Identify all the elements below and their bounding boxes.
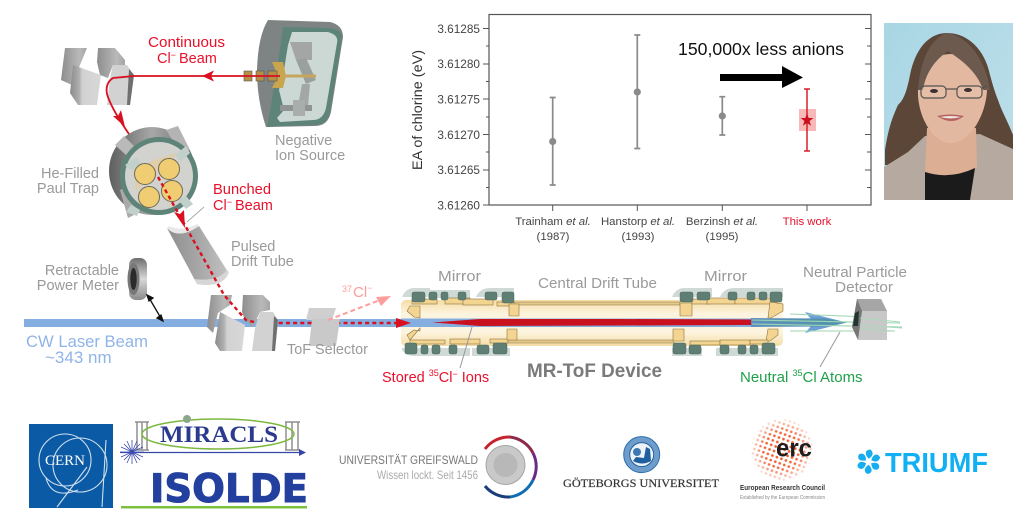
leader line: neutral atoms (820, 332, 840, 367)
label: 37Cl: 37 (342, 284, 352, 294)
label: stored ions: Cl (439, 370, 452, 386)
stored ions (433, 318, 751, 327)
logo: ISOLDE: ISOLDE (150, 467, 308, 512)
label: stored ions: Stored (382, 370, 425, 386)
logo: TRIUMF: TRIUMF (885, 447, 988, 478)
neck (925, 128, 977, 178)
y axis tick labels: 3.61260 (437, 198, 480, 212)
glasses (917, 86, 987, 98)
data: Trainham 1987 (549, 98, 556, 185)
data: Berzinsh 1995 (719, 97, 726, 135)
neutral beam (751, 312, 902, 333)
MR-ToF device (396, 288, 902, 356)
device body (401, 300, 783, 346)
face (918, 54, 987, 143)
label: continuous beam: Cl (157, 51, 171, 67)
label: negative ion source: Ion Source (275, 148, 345, 164)
hair (885, 33, 1013, 165)
laser beam (24, 319, 434, 327)
mirror electrodes: green (405, 292, 782, 354)
y axis title: EA of chlorine (eV) (409, 50, 425, 170)
label: continuous beam: Continuous (148, 35, 225, 51)
category labels: (1993) (622, 231, 655, 243)
label: neutral atoms: Cl Atoms (803, 369, 863, 386)
category labels: (1987) (537, 231, 570, 243)
label: stored ions: − (452, 369, 458, 379)
icon: lower quadrupole bender, front blocks (215, 312, 278, 351)
label: CW laser beam: CW Laser Beam (26, 332, 148, 351)
logo: Universität Greifswald: UNIVERSITÄT GREIFSWALD (339, 453, 478, 467)
laser inside device (401, 318, 753, 327)
diagram: beamline (24, 177, 907, 386)
label: neutral particle detector: Detector (835, 280, 893, 296)
label: 37Cl: − (367, 283, 372, 293)
label: bunched beam: Bunched (213, 182, 271, 198)
logo: ERC: Established by the European Commission (740, 495, 825, 501)
icon: He-filled Paul trap (109, 126, 198, 218)
logo: ERC (740, 419, 825, 501)
central tube walls (507, 302, 680, 343)
chart: EA of chlorine (409, 14, 871, 243)
label: retractable power meter: Power Meter (37, 278, 119, 294)
icon: ToF selector (306, 308, 340, 346)
icon: retractable power meter (128, 258, 147, 300)
data: Hanstorp 1993 (634, 35, 641, 148)
label: He-filled Paul trap: He-Filled (41, 166, 99, 182)
label: neutral atoms: 35 (793, 368, 803, 378)
annotation text: 150,000x less anions (678, 39, 844, 59)
arrow: entering ions (396, 318, 411, 328)
icon: lower quadrupole bender, back blocks (207, 295, 270, 333)
label: mirror right: Mirror (704, 269, 747, 285)
logo: Göteborgs Universitet (563, 437, 720, 490)
logo: ERC: European Research Council (740, 483, 825, 492)
arrow: continuous beam (107, 70, 280, 134)
logo: Universität Greifswald (339, 437, 536, 497)
y axis tick labels: 3.61280 (437, 57, 480, 71)
category labels (515, 216, 832, 243)
label: 37Cl: Cl (353, 284, 367, 301)
mirror electrodes: gold (407, 298, 783, 345)
label: retractable power meter: Retractable (45, 263, 119, 279)
category labels: Hanstorp et al. (601, 216, 675, 228)
label: ToF selector: ToF Selector (287, 342, 368, 358)
black top (925, 168, 975, 200)
y axis tick labels: 3.61270 (437, 128, 480, 142)
arrow: 37Cl deflected (328, 296, 391, 320)
y axis tick labels (437, 22, 480, 212)
label: neutral particle detector: Neutral Particle (803, 265, 907, 281)
label: continuous beam: Beam (179, 51, 217, 67)
label: bunched beam: Cl (213, 198, 227, 214)
category labels: Berzinsh et al. (686, 216, 758, 228)
label: continuous beam: − (171, 50, 176, 60)
mirror backing arcs (402, 288, 783, 356)
logo: MIRACLS (120, 415, 306, 464)
label: stored ions: Ions (458, 370, 489, 386)
icon: neutral particle detector (852, 299, 887, 340)
label: neutral atoms: Neutral (740, 369, 788, 386)
label: bunched beam: Beam (235, 198, 273, 214)
icon: pulsed drift tube (167, 224, 229, 285)
y axis tick labels: 3.61265 (437, 163, 480, 177)
diagram: ion source and Paul trap section (37, 20, 345, 285)
label: CW laser beam: ~343 nm (45, 348, 112, 367)
category labels: (1995) (706, 231, 739, 243)
arrow: bunched beam head (174, 210, 185, 228)
y axis tick labels: 3.61275 (437, 92, 480, 106)
label: central drift tube: Central Drift Tube (538, 276, 657, 292)
logo: CERN (29, 424, 113, 508)
photo: portrait (884, 23, 1013, 200)
annotation arrow (720, 66, 803, 88)
label: bunched beam: − (227, 197, 232, 207)
ion beam: bunched dashed path (158, 177, 402, 323)
category labels: Trainham et al. (515, 216, 591, 228)
icon: upper quadrupole bender (61, 48, 134, 105)
jacket (884, 134, 1013, 200)
label: MR-ToF device: MR-ToF Device (527, 361, 662, 382)
y axis tick labels: 3.61285 (437, 22, 480, 36)
category labels: This work (783, 216, 832, 228)
label: mirror left: Mirror (438, 269, 481, 285)
arrow: retract direction (147, 295, 163, 321)
icon: negative ion source (244, 20, 343, 127)
label: stored ions: 35 (429, 368, 439, 378)
label: pulsed drift tube: Pulsed (231, 239, 275, 255)
hair parting (918, 33, 990, 90)
logo: ERC: erc (776, 434, 812, 462)
data: this work (799, 89, 816, 151)
eyes (930, 88, 972, 93)
label: negative ion source: Negative (275, 133, 332, 149)
mouth (937, 114, 964, 121)
leader line: bunched beam (187, 207, 204, 222)
neutral rays over detector (860, 318, 902, 331)
leader line: stored ions (460, 327, 472, 368)
plot frame (489, 14, 871, 205)
logo: Göteborgs Universitet: GÖTEBORGS UNIVERSITET (563, 476, 720, 490)
label: pulsed drift tube: Drift Tube (231, 254, 294, 270)
label: He-filled Paul trap: Paul Trap (37, 181, 99, 197)
logo: Universität Greifswald: Wissen lockt. Seit 1456 (377, 468, 478, 482)
logo: MIRACLS: MIRACLS (160, 422, 278, 447)
logo: CERN: CERN (45, 453, 85, 469)
y axis ticks (483, 28, 871, 211)
